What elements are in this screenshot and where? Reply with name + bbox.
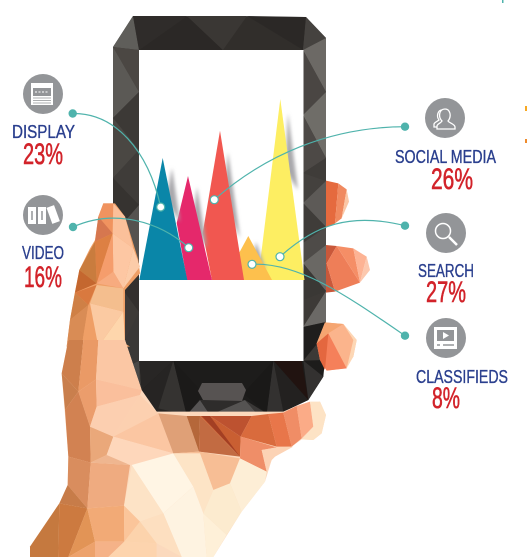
fingers on right side [317, 181, 370, 371]
phone screen [139, 50, 304, 361]
phone [113, 16, 326, 415]
yellow peak shadow [285, 113, 298, 190]
blue peak [139, 158, 187, 280]
icon: social media [425, 98, 465, 138]
label: search 27%: 27% [426, 276, 466, 309]
label: video 16%: VIDEO [22, 243, 64, 263]
icon: classifieds [426, 318, 466, 358]
phone left bezel [113, 47, 140, 392]
yellow peak [258, 99, 304, 280]
orange peak [238, 236, 272, 280]
label: social media 26%: 26% [431, 163, 473, 196]
connector: classifieds [252, 264, 409, 340]
phone top bezel [113, 16, 326, 50]
label: search 27%: SEARCH [418, 261, 474, 281]
label: classifieds 8% [416, 367, 508, 415]
label: social media 26%: SOCIAL MEDIA [395, 147, 496, 167]
magenta peak shadow [192, 187, 207, 248]
hand upper palm and thumb [67, 203, 140, 347]
icon: search [426, 213, 466, 253]
phone home button [198, 383, 246, 401]
label: display 23%: 23% [23, 138, 63, 171]
red peak [203, 131, 244, 280]
phone right bezel [303, 38, 326, 361]
connector: display [68, 109, 161, 207]
label: search 27% [418, 261, 474, 309]
connector: search [280, 220, 409, 257]
magenta peak [177, 176, 212, 280]
hand lower palm and wrist [30, 340, 326, 557]
connector: social media [214, 122, 409, 200]
phone bottom bezel [139, 360, 325, 415]
label: video 16% [22, 243, 64, 294]
bar chart: triangle peaks [139, 99, 304, 280]
hand [30, 181, 370, 557]
connector: video [69, 218, 189, 248]
red peak shadow [223, 152, 240, 238]
label: display 23%: DISPLAY [12, 122, 75, 142]
blue peak shadow [166, 168, 180, 222]
label: video 16%: 16% [24, 261, 62, 294]
orange peak shadow [252, 242, 266, 270]
icon: display [23, 74, 63, 114]
label: display 23% [12, 122, 75, 171]
label: social media 26% [395, 147, 496, 196]
label: classifieds 8%: 8% [432, 382, 460, 415]
chart dots [157, 196, 284, 268]
phone body [113, 16, 326, 412]
icon: video [23, 195, 63, 235]
edge specks [502, 0, 527, 143]
